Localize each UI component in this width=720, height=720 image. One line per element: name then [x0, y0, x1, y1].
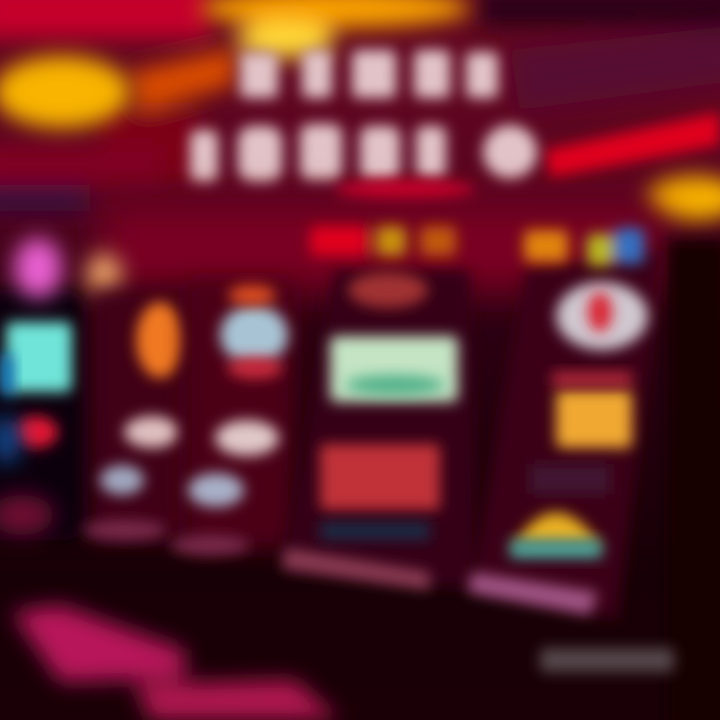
dark right wall — [668, 240, 720, 720]
slot machine 5 — [468, 250, 662, 620]
slot machine 4 marquee — [310, 226, 456, 256]
blurred caption bottom right — [540, 648, 674, 672]
slot machine 3 — [170, 280, 295, 555]
slot machine 5 marquee — [524, 228, 644, 266]
ceiling lights — [0, 0, 720, 220]
machine top glow — [100, 205, 660, 290]
slot machine 2 — [83, 290, 195, 540]
yellow ceiling lamp top — [200, 0, 470, 58]
red glow under title — [335, 180, 475, 200]
pink seats — [12, 605, 340, 720]
yellow lamp right — [647, 176, 720, 220]
red light band right — [545, 112, 720, 178]
slot machine 1 — [0, 238, 122, 540]
slot machine 4 — [282, 270, 478, 590]
yellow ceiling lamp left — [0, 56, 130, 128]
blurred title lettering — [190, 50, 537, 182]
